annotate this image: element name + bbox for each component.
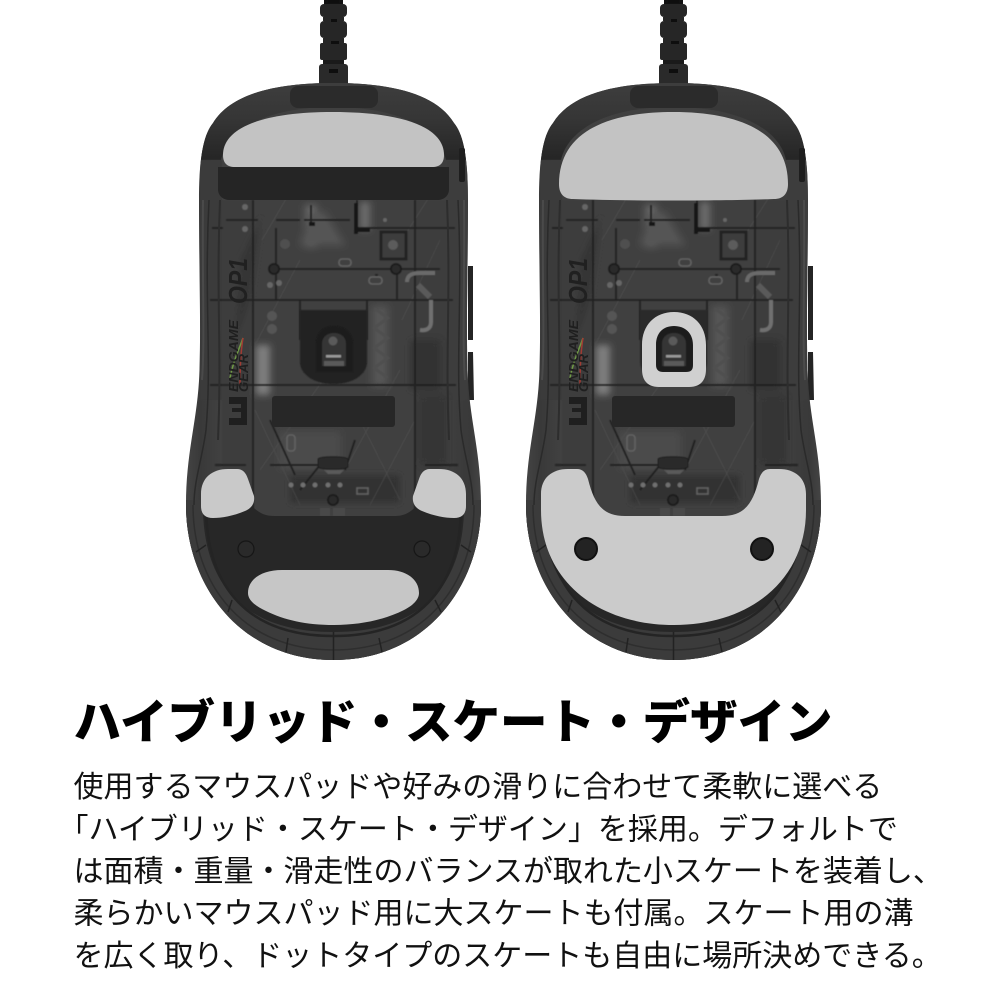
- screw right: [414, 541, 430, 557]
- sensor ring skate: [642, 312, 706, 387]
- sensor window: [316, 326, 353, 372]
- body text: 「ハイブリッド・スケート・デザイン」を採用。デフォルトで: [58, 814, 898, 846]
- sensor window: [656, 326, 693, 372]
- mouse underside with large skates: [520, 0, 830, 680]
- body text: 使用するマウスパッドや好みの滑りに合わせて柔軟に選べる: [74, 771, 882, 804]
- body text: [58, 771, 943, 973]
- left foot skate: [201, 469, 254, 518]
- large bottom skate: [541, 469, 806, 625]
- title: ハイブリッド・スケート・デザイン: [74, 696, 833, 750]
- screw left: [575, 538, 597, 560]
- mouse underside with small skates: [180, 0, 490, 680]
- small bottom skate: [248, 570, 419, 625]
- dark skate channel: [218, 167, 449, 200]
- body text: は面積・重量・滑走性のバランスが取れた小スケートを装着し、: [74, 856, 943, 888]
- sensor recess pad: [640, 310, 707, 384]
- body text: を広く取り、ドットタイプのスケートも自由に場所決めできる。: [74, 940, 942, 973]
- screw left: [238, 541, 254, 557]
- small top skate: [223, 112, 444, 167]
- sensor recess pad: [300, 310, 367, 384]
- large top skate: [559, 112, 788, 200]
- right foot skate: [413, 469, 466, 518]
- screw right: [751, 538, 773, 560]
- body text: 柔らかいマウスパッド用に大スケートも付属。スケート用の溝: [74, 898, 914, 930]
